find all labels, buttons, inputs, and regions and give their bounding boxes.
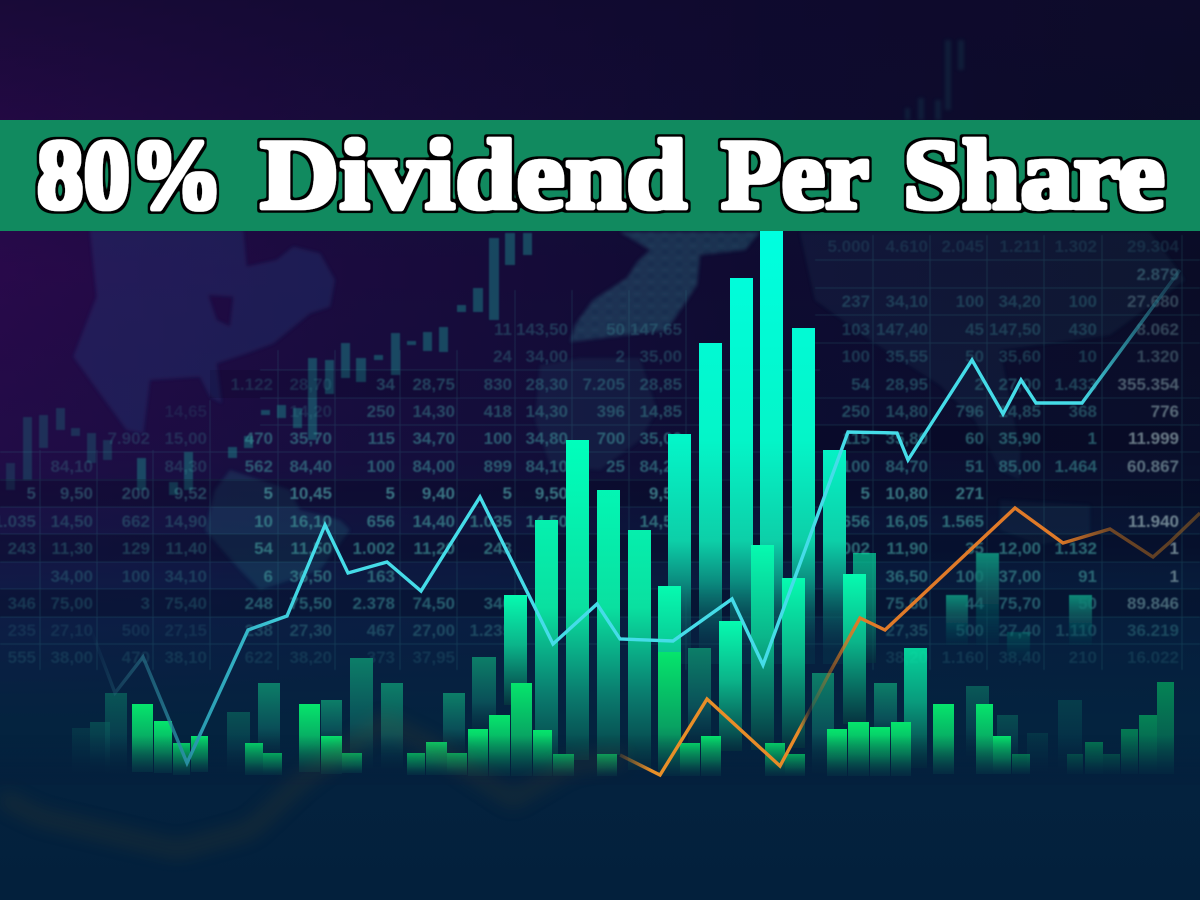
row 493: 9,50 [60,484,93,503]
row 384: 2 [975,375,984,394]
row 493: 5 [386,484,395,503]
row 521: 662 [122,512,150,531]
row 438: 34,80 [525,429,568,448]
row 657: 373 [367,648,395,667]
row 657: 622 [245,648,273,667]
row 329: 147,40 [876,320,928,339]
row 521 [0,512,1179,531]
row 603: 3 [141,594,150,613]
table grid lines [0,235,1200,670]
row 438: 115 [368,429,395,448]
row 576: 36,50 [289,567,332,586]
row 493: 200 [122,484,150,503]
stock price table numbers: 4.610 [885,237,928,256]
row 630: 235 [8,621,36,640]
row 466: 100 [367,457,395,476]
row 356: 34,00 [525,347,568,366]
row 576: 6 [264,567,273,586]
row 301: 34,10 [885,292,928,311]
row 384: 28,75 [412,375,455,394]
row 493: 9,40 [422,484,455,503]
row 521: 656 [842,512,870,531]
row 603: 44 [965,594,985,613]
row 548: 129 [122,539,150,558]
row 548: 11,20 [413,539,455,558]
row 548: 11,90 [886,539,928,558]
row 576: 34,00 [50,567,93,586]
row 548: 243 [484,539,512,558]
back teal bars far right [946,553,1092,662]
row 603: 346 [8,594,36,613]
row 548: 11,30 [51,539,93,558]
row 548 [8,539,1179,558]
row 411: 14,65 [164,402,207,421]
tall cyan bars [668,231,846,664]
row 411: 796 [956,402,984,421]
row 630: 36.219 [1127,621,1179,640]
row 657: 38,00 [50,648,93,667]
small teal bars left and right [72,658,1082,773]
row 329: 11 [494,320,512,339]
row 657: 38,10 [164,648,207,667]
row 411: 14,30 [525,402,568,421]
row 493: 10,45 [289,484,332,503]
row 438: 35,70 [289,429,332,448]
row 384 [230,375,1180,394]
row 657: 38,20 [289,648,332,667]
row 521: 14,90 [164,512,207,531]
map: Africa [535,358,657,470]
row 603: 248 [245,594,273,613]
row 493: 10,80 [885,484,928,503]
title text: Dividend [260,119,687,230]
row 356: 35,60 [998,347,1041,366]
row 384: 28,70 [289,375,332,394]
row 438: 35,80 [885,429,928,448]
title text: Share [903,119,1165,230]
row 438: 60 [965,429,984,448]
row 493: 5 [27,484,36,503]
row 466: 84,00 [412,457,455,476]
row 411: 14,20 [289,402,332,421]
row 356: 35,55 [885,347,928,366]
row 548: 54 [254,539,274,558]
row 301: 34,20 [998,292,1041,311]
row 466: 562 [245,457,273,476]
row 384: 830 [484,375,512,394]
row 657: 470 [122,648,150,667]
candlestick chart background [6,233,532,495]
stock price table numbers: 2.045 [941,237,984,256]
row 603 [8,594,1179,613]
row 576: 100 [956,567,984,586]
row 356: 100 [842,347,870,366]
row 466: 100 [842,457,870,476]
row 493: 9,50 [649,484,682,503]
row 657: 38,40 [998,648,1041,667]
row 438: 35,00 [639,429,682,448]
row 438: 35,90 [998,429,1041,448]
row 548: 12,00 [998,539,1041,558]
row 384: 27,00 [998,375,1041,394]
row 630: 467 [367,621,395,640]
row 493: 5 [503,484,512,503]
row 630: 238 [245,621,273,640]
orange trend line [620,508,1200,775]
map: Europe mesh [570,232,760,342]
row 411: 396 [597,402,625,421]
row 411: 418 [484,402,512,421]
row 493 [27,484,984,503]
row 466: 84,30 [164,457,207,476]
row 438: 700 [597,429,625,448]
row 548: 11,40 [165,539,207,558]
row 384: 7.205 [582,375,625,394]
row 521: 14,50 [50,512,93,531]
row 438: 7.902 [107,429,150,448]
row 384: 28,85 [639,375,682,394]
row 603: 346 [484,594,512,613]
row 329 [494,320,1179,339]
row 603: 75,60 [885,594,928,613]
row 384: 34 [376,375,396,394]
row 630: 500 [122,621,150,640]
blurred orange reflection [0,722,625,850]
row 630: 1.110 [1055,621,1097,640]
row 438: 115 [843,429,870,448]
row 548: 35 [965,539,984,558]
row 329: 45 [965,320,984,339]
title banner [0,119,1200,231]
row 411: 250 [842,402,870,421]
row 384: 1.122 [230,375,273,394]
row 356: 35,00 [639,347,682,366]
row 466: 84,10 [50,457,93,476]
row 411 [164,402,1179,421]
title text: 80% [37,119,223,230]
row 301: 27.680 [1127,292,1179,311]
row 356 [493,347,1179,366]
row 466: 84,70 [885,457,928,476]
row 630: 1.235 [469,621,512,640]
row 411: 250 [367,402,395,421]
row 521: 11.940 [1128,512,1179,531]
row 329: 103 [842,320,870,339]
row 384: 28,95 [885,375,928,394]
row 301: 100 [1069,292,1097,311]
row 356: 10 [1078,347,1097,366]
row 356: 2 [616,347,625,366]
row 466: 51 [965,457,984,476]
map: North America [73,230,335,433]
row 548: 1.002 [352,539,395,558]
mint mid bars [535,440,651,775]
row 548: 1.002 [827,539,870,558]
row 301: 237 [842,292,870,311]
row 329: 8.062 [1136,320,1179,339]
row 356: 24 [493,347,513,366]
row 466: 85,00 [998,457,1041,476]
row 301 [842,292,1179,311]
row 548: 1.132 [1054,539,1097,558]
row 411: 776 [1151,402,1179,421]
stock price table numbers: 1.302 [1054,237,1097,256]
row 657: 1.160 [941,648,984,667]
row 329: 147,65 [630,320,682,339]
row 548: 1 [1170,539,1179,558]
stock price table numbers: 5.000 [827,237,870,256]
row 384: 1.433 [1054,375,1097,394]
row 466: 899 [484,457,512,476]
row 438: 11.999 [1128,429,1179,448]
row 493: 5 [861,484,870,503]
stock price table numbers: 2.879 [1136,265,1179,284]
row 466: 1.464 [1054,457,1098,476]
world map silhouettes [73,230,1185,590]
row 657: 210 [1069,648,1097,667]
row 384: 54 [851,375,871,394]
row 548: 243 [8,539,36,558]
row 329: 143,50 [516,320,568,339]
row 438: 100 [484,429,512,448]
front green bars [472,545,927,776]
row 603: 75,50 [289,594,332,613]
row 630 [8,621,1179,640]
row 603: 50 [1078,594,1097,613]
cyan trend line [90,270,1180,763]
row 603: 89.846 [1127,594,1179,613]
stock price table numbers: 1.211 [999,237,1041,256]
row 329: 147,50 [989,320,1041,339]
row 411: 368 [1069,402,1097,421]
row 657: 38,20 [885,648,928,667]
row 493: 271 [956,484,984,503]
row 657: 555 [8,648,36,667]
row 576: 100 [122,567,150,586]
map: Europe [570,232,760,342]
row 356: 50 [965,347,984,366]
row 630: 27,30 [289,621,332,640]
row 521: 14,50 [639,512,682,531]
row 603: 74,50 [412,594,455,613]
row 576: 91 [1078,567,1097,586]
row 576: 34,10 [164,567,207,586]
title text: Per [721,119,869,230]
bottom fade overlay [0,735,1200,785]
row 603: 75,40 [164,594,207,613]
map: Asia [800,232,1185,480]
row 630: 500 [956,621,984,640]
row 630: 27,15 [164,621,207,640]
row 329: 50 [606,320,625,339]
row 493: 9,50 [535,484,568,503]
row 630: 27,35 [885,621,928,640]
row 466: 60.867 [1127,457,1179,476]
row 657: 37,95 [412,648,455,667]
map: Australia [1000,500,1090,545]
row 466: 84,10 [525,457,568,476]
row 521: 1.035 [469,512,512,531]
row 301: 100 [956,292,984,311]
row 411: 14,80 [885,402,928,421]
row 603: 75,70 [998,594,1041,613]
darker table row bands [0,370,1200,617]
row 657 [8,648,1179,667]
stock price table numbers: 29.304 [1127,237,1180,256]
row 576 [50,567,1179,586]
faint candlesticks top right [905,40,964,120]
row 493: 5 [264,484,273,503]
row 630: 27,00 [412,621,455,640]
row 466: 25 [606,457,625,476]
row 384: 355.354 [1118,375,1180,394]
stock price table numbers [0,237,1180,667]
row 603: 2.378 [352,594,395,613]
small bright green bars [132,682,1174,776]
row 630: 27,10 [50,621,93,640]
map: South America [205,470,350,590]
row 438: 470 [245,429,273,448]
row 603: 75,00 [50,594,93,613]
row 576: 163 [367,567,395,586]
row 521: 14,40 [412,512,455,531]
row 411: 14,30 [412,402,455,421]
row 384: 28,30 [525,375,568,394]
row 576: 37,00 [998,567,1041,586]
row 521: 10 [254,512,273,531]
row 521: 16,05 [885,512,928,531]
row 548: 11,50 [290,539,332,558]
row 493: 9,52 [174,484,207,503]
title text [37,119,1165,230]
row 466: 84,40 [289,457,332,476]
row 411: 14,85 [639,402,682,421]
row 521: 16,10 [289,512,332,531]
row 438: 1 [1088,429,1097,448]
row 657: 16.022 [1127,648,1179,667]
row 466 [50,457,1179,476]
row 576: 1 [1170,567,1179,586]
row 466: 84,20 [639,457,682,476]
row 356: 1.320 [1136,347,1179,366]
row 630: 27,40 [998,621,1041,640]
row 438 [107,429,1179,448]
row 438: 15,00 [164,429,207,448]
row 438: 34,70 [412,429,455,448]
row 521: 656 [367,512,395,531]
row 329: 430 [1069,320,1097,339]
row 521: 14,50 [525,512,568,531]
row 521: 1.565 [941,512,984,531]
row 411: 14,85 [998,402,1041,421]
row 576: 36,50 [885,567,928,586]
